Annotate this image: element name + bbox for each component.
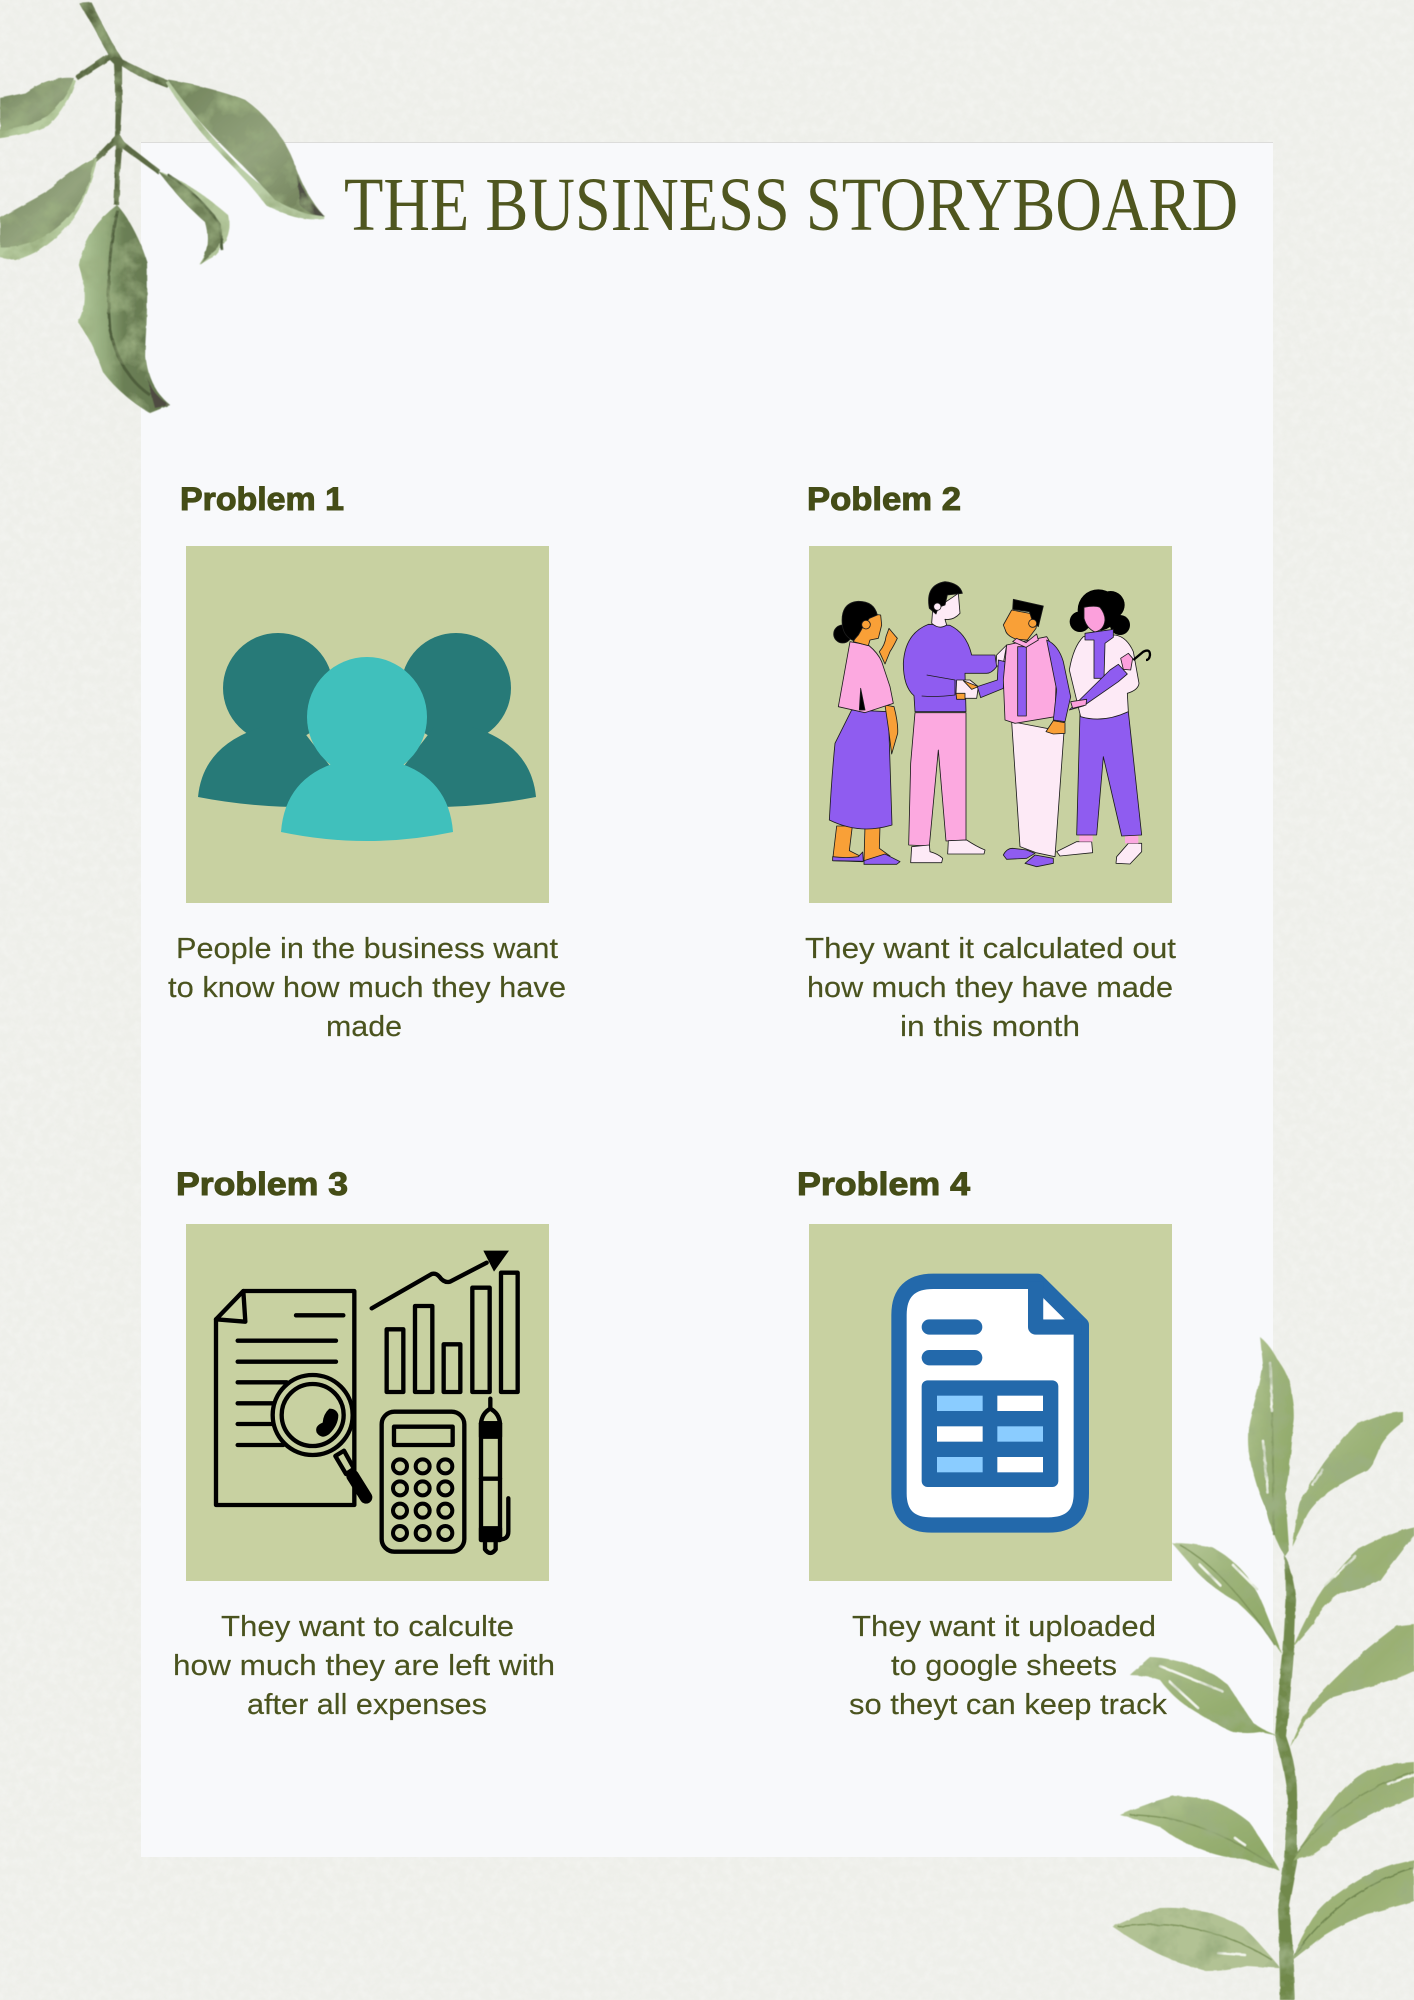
text: problem 1 description: People in the business want xyxy=(176,933,558,965)
heading: problem 3: Problem 3 xyxy=(176,1166,348,1202)
text: problem 4 description xyxy=(849,1611,1168,1721)
heading: problem 1: Problem 1 xyxy=(180,481,344,517)
figure: woman with umbrella xyxy=(1057,589,1150,864)
text: problem 1 description: to know how much they have xyxy=(168,972,566,1004)
heading: problem 4: Problem 4 xyxy=(797,1166,970,1202)
icon: document with magnifier xyxy=(216,1291,366,1505)
text: problem 4 description: so theyt can keep track xyxy=(849,1689,1168,1721)
icon: calculator xyxy=(382,1412,464,1552)
text: problem 2 description: They want it calculated out xyxy=(805,933,1176,965)
figure: man in pink vest xyxy=(977,599,1071,867)
icon: spreadsheet document xyxy=(899,1281,1081,1525)
figure: man in purple sweater xyxy=(903,582,1007,863)
icon: team silhouettes xyxy=(198,633,536,841)
text: problem 3 description: after all expenses xyxy=(247,1689,487,1721)
icon: rising bar chart xyxy=(372,1251,518,1392)
panel: problem 3 finance icons xyxy=(186,1224,549,1581)
figure: woman with bun xyxy=(829,601,900,864)
decoration: leaf plant bottom right xyxy=(1113,1337,1414,2000)
heading: problem 2: Poblem 2 xyxy=(807,481,961,517)
panel: problem 1 people icon xyxy=(186,546,549,903)
text: problem 2 description xyxy=(805,933,1176,1043)
text: problem 1 description xyxy=(168,933,566,1043)
title: THE BUSINESS STORYBOARD xyxy=(344,163,1238,247)
text: problem 4 description: to google sheets xyxy=(891,1650,1117,1682)
panel: problem 2 people illustration xyxy=(809,546,1172,903)
text: problem 2 description: in this month xyxy=(900,1011,1080,1043)
text: problem 1 description: made xyxy=(326,1011,402,1043)
text: problem 3 description: how much they are left with xyxy=(173,1650,555,1682)
panel: problem 4 spreadsheet icon xyxy=(809,1224,1172,1581)
text: problem 3 description xyxy=(173,1611,555,1721)
icon: pen xyxy=(481,1399,508,1553)
text: problem 3 description: They want to calculte xyxy=(221,1611,514,1643)
text: problem 2 description: how much they have made xyxy=(807,972,1173,1004)
decoration: leaf branch top left xyxy=(0,2,324,413)
white content panel xyxy=(141,142,1273,1857)
text: problem 4 description: They want it uploaded xyxy=(852,1611,1156,1643)
